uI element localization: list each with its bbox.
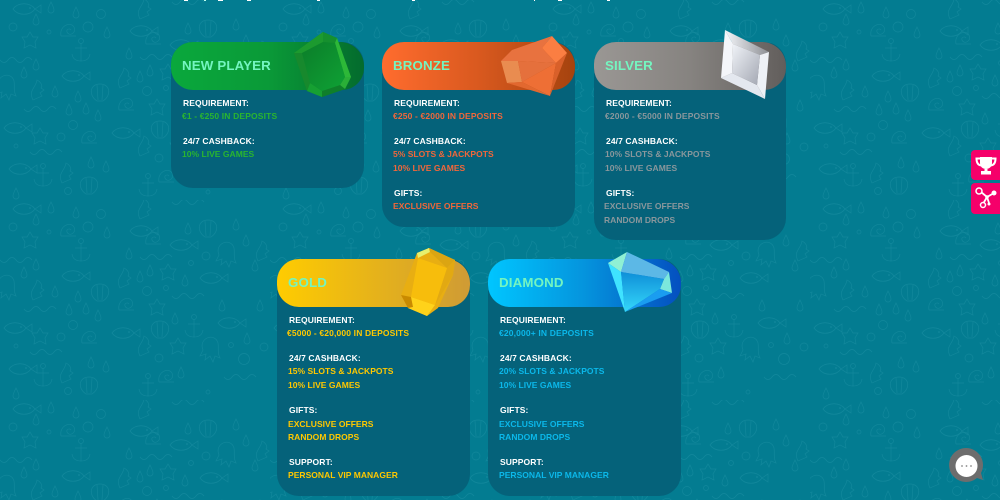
icon: bronze gem [501,36,567,96]
gifts label: GIFTS: [500,405,528,415]
requirement value: €2000 - €5000 IN DEPOSITS [605,111,720,121]
header: diamond: DIAMOND [499,275,564,290]
requirement value: €250 - €2000 IN DEPOSITS [393,111,503,121]
gifts value one: EXCLUSIVE OFFERS [288,419,374,429]
gifts value: EXCLUSIVE OFFERS [393,201,478,211]
header: silver [594,42,786,90]
requirement label: REQUIREMENT: [183,98,249,108]
header: new player [171,42,364,90]
button: network [971,183,1000,214]
icon: silver gem [721,30,769,99]
icon: trophy [976,157,996,174]
icon: network nodes [975,187,996,208]
button: trophy [971,150,1000,180]
gifts value one: EXCLUSIVE OFFERS [499,419,584,429]
icon: gold gem [401,248,455,316]
cashback slots value: 20% SLOTS & JACKPOTS [499,366,604,376]
cashback slots value: 10% SLOTS & JACKPOTS [605,149,710,159]
cashback label: 24/7 CASHBACK: [606,136,678,146]
cashback live games value: 10% LIVE GAMES [393,163,465,173]
header: diamond [488,259,681,307]
gifts label: GIFTS: [289,405,317,415]
requirement value: €5000 - €20,000 IN DEPOSITS [287,328,409,338]
panel: silver tier [594,42,786,240]
cashback live games value: 10% LIVE GAMES [288,380,360,390]
header: gold: GOLD [288,275,327,290]
gifts value two: RANDOM DROPS [499,432,570,442]
requirement value: €1 - €250 IN DEPOSITS [182,111,277,121]
requirement label: REQUIREMENT: [500,315,566,325]
cashback live games value: 10% LIVE GAMES [605,163,677,173]
cashback label: 24/7 CASHBACK: [289,353,361,363]
panel: diamond tier [488,259,681,496]
cashback live games value: 10% LIVE GAMES [499,380,571,390]
cashback value: 10% LIVE GAMES [182,149,254,159]
cashback label: 24/7 CASHBACK: [394,136,466,146]
support value: PERSONAL VIP MANAGER [499,470,609,480]
header: gold [277,259,470,307]
panel: new player tier [171,42,364,188]
icon: emerald gem [294,32,351,97]
chat widget button [949,448,983,482]
support label: SUPPORT: [500,457,544,467]
requirement label: REQUIREMENT: [606,98,672,108]
gifts label: GIFTS: [606,188,634,198]
header: bronze [382,42,575,90]
gifts value two: RANDOM DROPS [604,215,675,225]
panel: bronze tier [382,42,575,227]
gifts label: GIFTS: [394,188,422,198]
support label: SUPPORT: [289,457,333,467]
requirement label: REQUIREMENT: [289,315,355,325]
header: silver: SILVER [605,58,653,73]
cashback label: 24/7 CASHBACK: [500,353,572,363]
gifts value two: RANDOM DROPS [288,432,359,442]
cashback label: 24/7 CASHBACK: [183,136,255,146]
requirement label: REQUIREMENT: [394,98,460,108]
requirement value: €20,000+ IN DEPOSITS [499,328,594,338]
gifts value one: EXCLUSIVE OFFERS [604,201,690,211]
header: bronze: BRONZE [393,58,450,73]
support value: PERSONAL VIP MANAGER [288,470,398,480]
panel: gold tier [277,259,470,496]
cashback slots value: 15% SLOTS & JACKPOTS [288,366,393,376]
header: new player: NEW PLAYER [182,58,271,73]
cashback slots value: 5% SLOTS & JACKPOTS [393,149,494,159]
icon: blue diamond [608,252,672,312]
